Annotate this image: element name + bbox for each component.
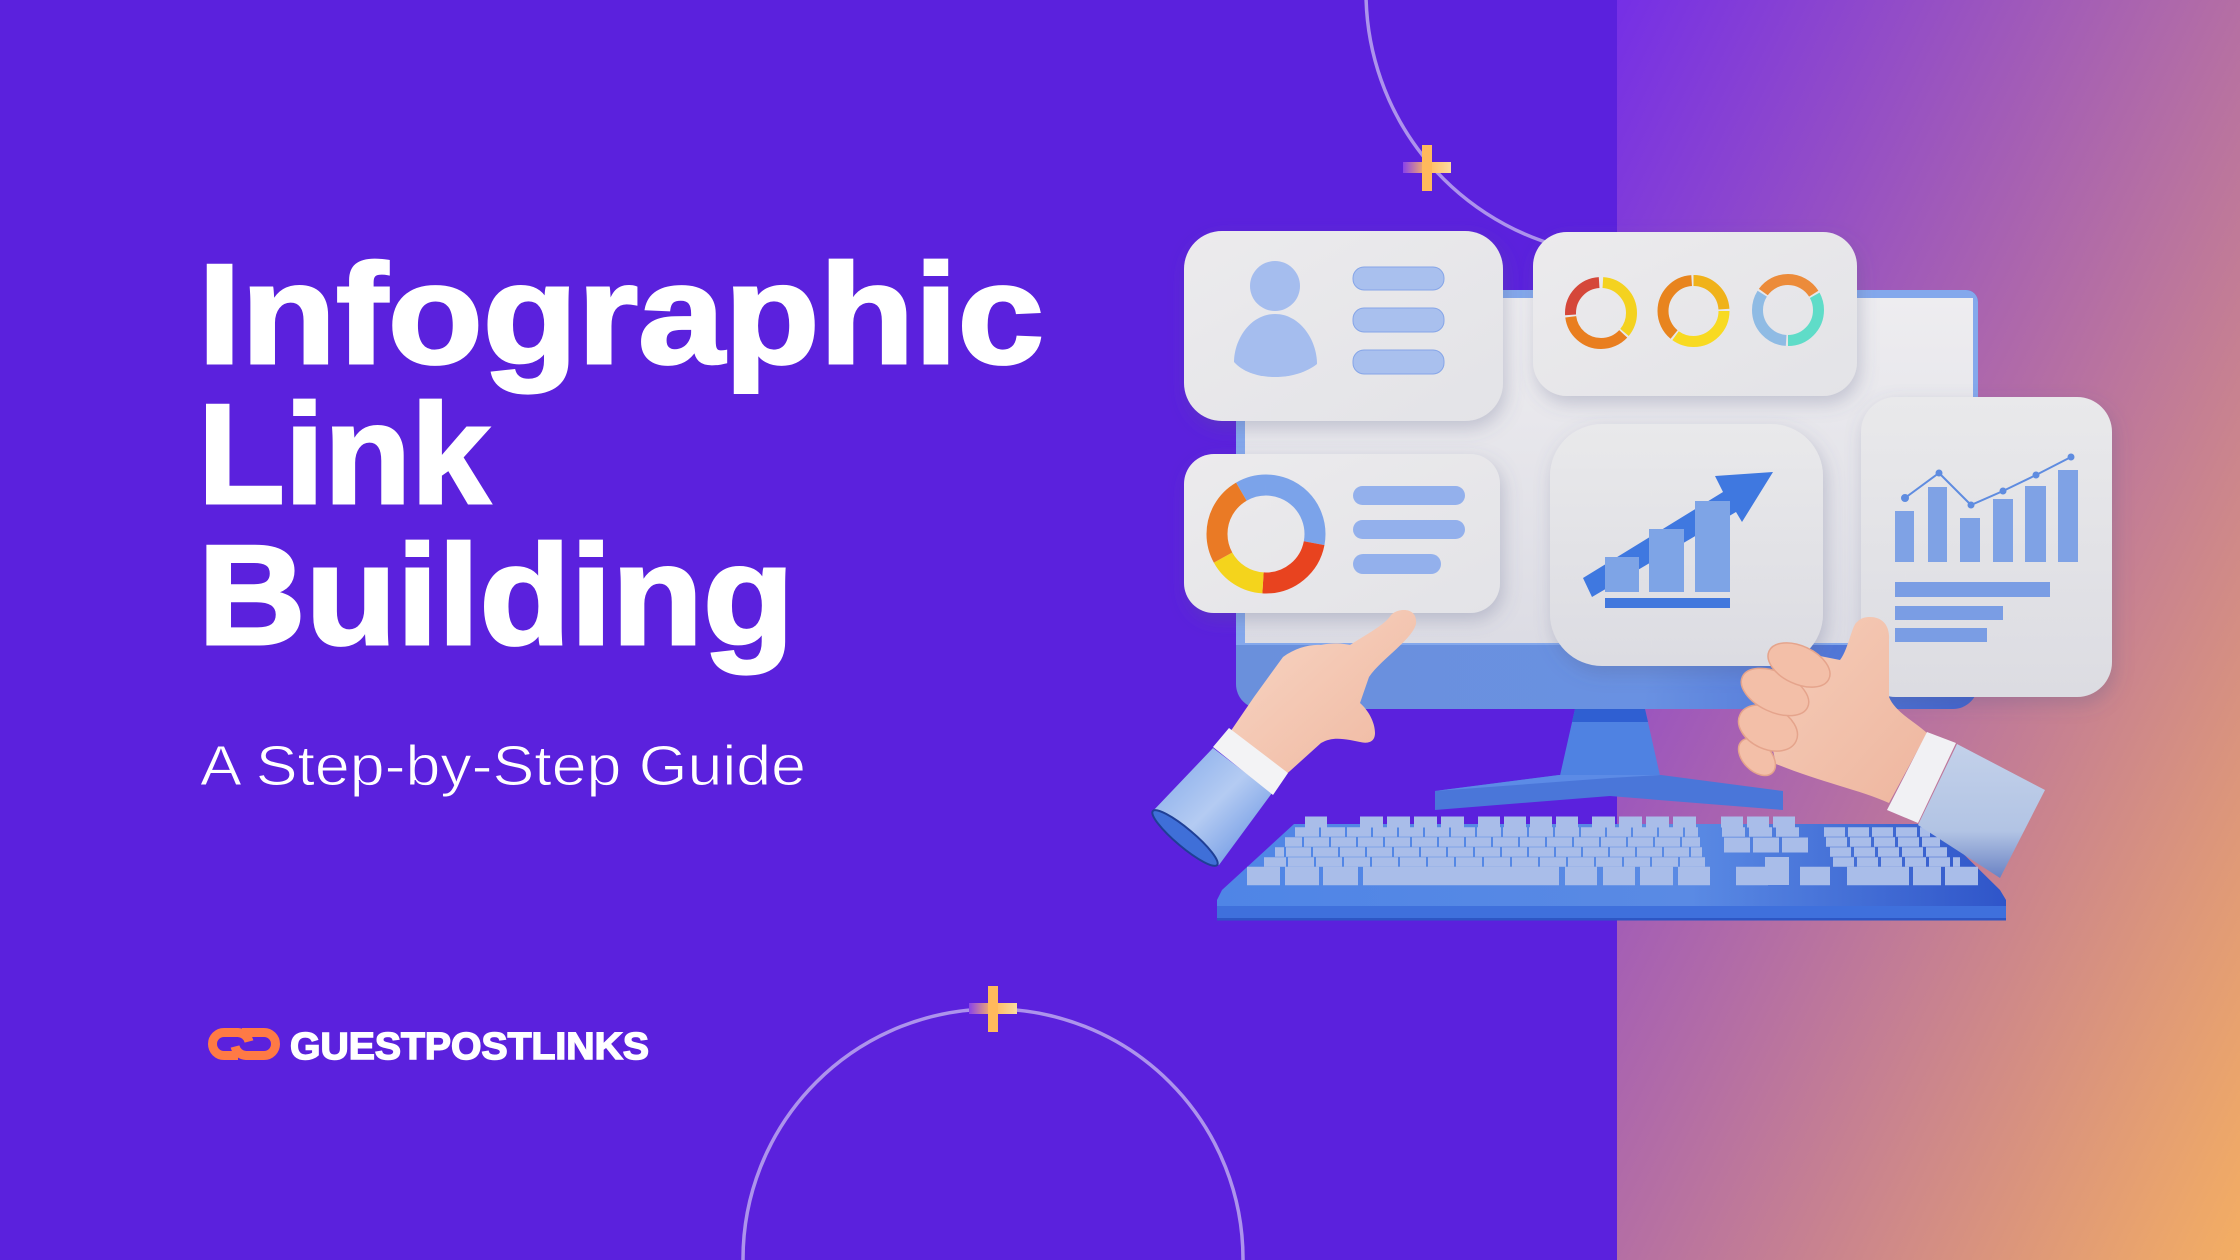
line chart — [1902, 454, 2074, 508]
rising bars — [1605, 501, 1730, 592]
right cuff — [1887, 732, 1956, 823]
card: three donuts — [1533, 232, 1857, 396]
decorative circle: bottom arc — [743, 1009, 1243, 1260]
left sleeve — [1152, 748, 1272, 865]
left sleeve opening — [1147, 804, 1223, 872]
right hand thumbs up — [1731, 617, 2045, 878]
right hand — [1762, 617, 1927, 803]
logo: GuestPostLinks — [213, 1026, 649, 1068]
logo wordmark: GUESTPOSTLINKS — [290, 1026, 649, 1068]
left hand — [1226, 610, 1416, 780]
icon: chain link — [213, 1032, 276, 1056]
keyboard — [1217, 822, 2006, 920]
title: Building — [198, 516, 794, 675]
icon: bottom plus — [969, 986, 1017, 1032]
card: bar and line report — [1861, 397, 2112, 697]
card: large donut — [1184, 454, 1500, 613]
left cuff — [1213, 728, 1288, 795]
profile text lines — [1353, 267, 1444, 374]
icon: rising arrow — [1583, 472, 1773, 597]
background panel: right gradient — [1617, 0, 2240, 1260]
icon: person — [1234, 261, 1317, 377]
right sleeve — [1918, 744, 2045, 878]
title: Link — [198, 375, 491, 534]
right fingers — [1731, 634, 1837, 782]
icon: top plus — [1403, 145, 1451, 191]
illustration: computer and dashboard — [1147, 231, 2112, 920]
title — [198, 235, 1044, 675]
donut 1 — [1570, 282, 1632, 344]
bar chart — [1895, 470, 2078, 562]
card: profile — [1184, 231, 1503, 421]
decorative circle: top arc — [1366, 0, 1560, 246]
monitor — [1236, 290, 1978, 709]
subtitle: A Step-by-Step Guide — [200, 734, 806, 798]
keyboard keys — [1247, 822, 1978, 885]
report text bars — [1895, 582, 2050, 642]
donut 3 — [1758, 280, 1818, 340]
card: growth arrow — [1550, 424, 1823, 666]
donut chart — [1217, 485, 1315, 583]
title: Infographic — [198, 235, 1044, 394]
legend lines — [1353, 486, 1465, 574]
donut 2 — [1663, 280, 1724, 342]
left hand pointing — [1147, 610, 1416, 872]
chart base — [1605, 598, 1730, 608]
monitor stand — [1435, 709, 1783, 810]
